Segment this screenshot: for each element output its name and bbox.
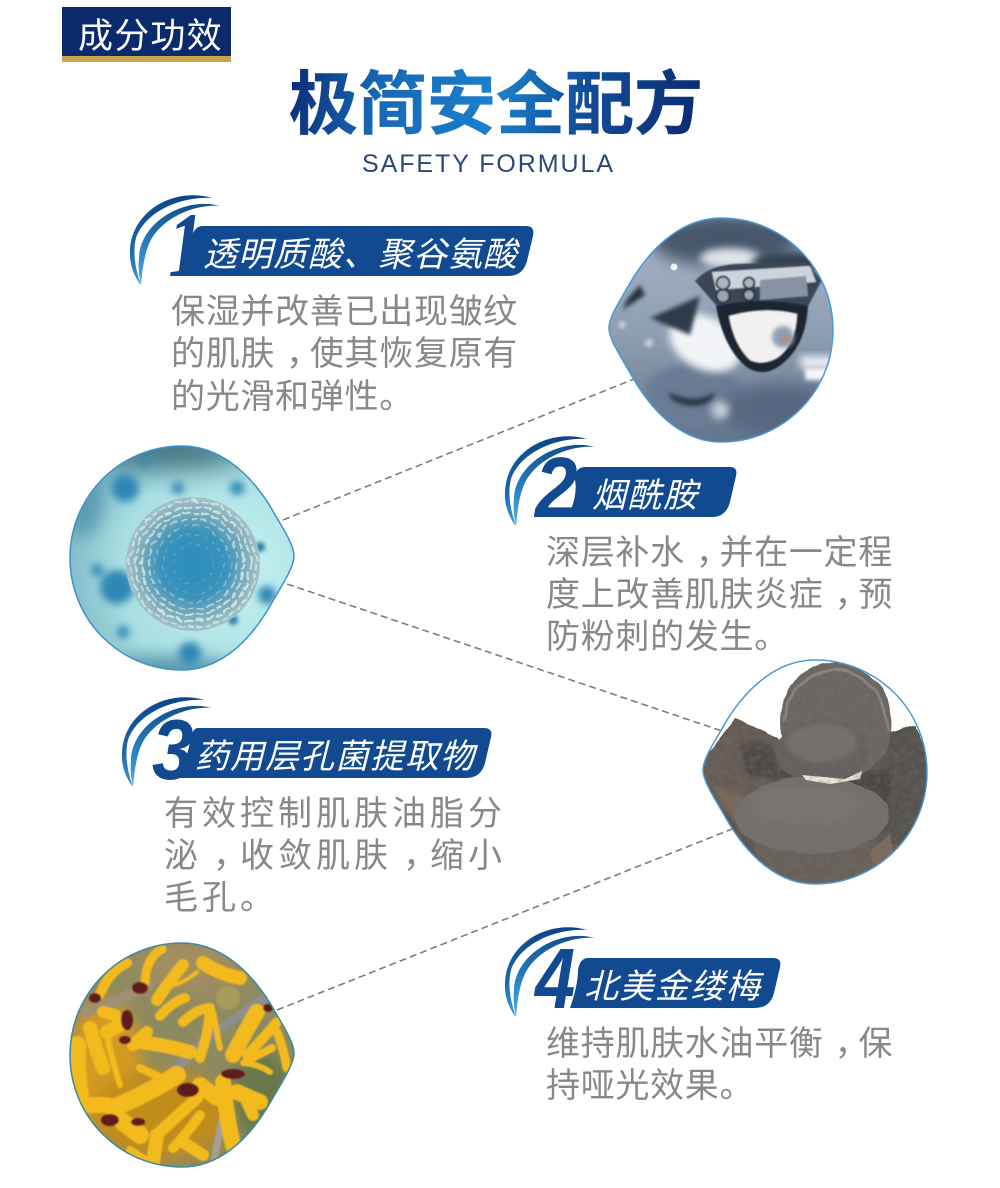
heading 2 <box>505 436 736 536</box>
heading 1: 1 <box>168 195 203 296</box>
heading 1: 透明质酸、聚谷氨酸 <box>203 236 520 274</box>
heading 1 <box>130 195 533 296</box>
heading 3 <box>122 697 491 797</box>
text block 1 <box>171 293 518 416</box>
heading 4: 4 <box>533 931 575 1026</box>
text block 2: 度上改善肌肤炎症 ，预 <box>546 576 893 614</box>
heading 4: 北美金缕梅 <box>584 968 765 1006</box>
photo: cell <box>69 445 295 671</box>
connector lines <box>277 379 732 1010</box>
heading 2: 2 <box>533 441 578 536</box>
photo: fungus <box>702 659 928 885</box>
text block 4 <box>546 1025 893 1105</box>
text block 2 <box>546 534 893 656</box>
section tag: 成分功效 <box>78 17 223 56</box>
section tag <box>62 7 231 62</box>
text block 3: 毛孔。 <box>164 879 278 917</box>
text block 1: 保湿并改善已出现皱纹 <box>171 293 518 331</box>
text block 3: 有效控制肌肤油脂分 <box>164 795 506 833</box>
text block 2: 防粉刺的发生。 <box>546 618 789 656</box>
text block 4: 持哑光效果。 <box>546 1067 754 1105</box>
text block 1: 的光滑和弹性。 <box>171 378 414 416</box>
heading 4 <box>505 927 780 1026</box>
text block 3 <box>164 795 506 917</box>
title: 极简安全配方 <box>289 66 703 143</box>
heading 2: 烟酰胺 <box>592 477 702 515</box>
text block 3: 泌 ，收敛肌肤 ，缩小 <box>164 837 506 875</box>
heading 3: 3 <box>152 703 194 797</box>
text block 2: 深层补水 ，并在一定程 <box>546 534 893 572</box>
heading 3: 药用层孔菌提取物 <box>195 738 479 776</box>
photo: water droplet <box>605 214 840 445</box>
photo: witch hazel flowers <box>66 937 298 1172</box>
text block 1: 的肌肤 ，使其恢复原有 <box>171 335 518 373</box>
text block 4: 维持肌肤水油平衡 ，保 <box>546 1025 893 1063</box>
subtitle: SAFETY FORMULA <box>362 150 613 178</box>
